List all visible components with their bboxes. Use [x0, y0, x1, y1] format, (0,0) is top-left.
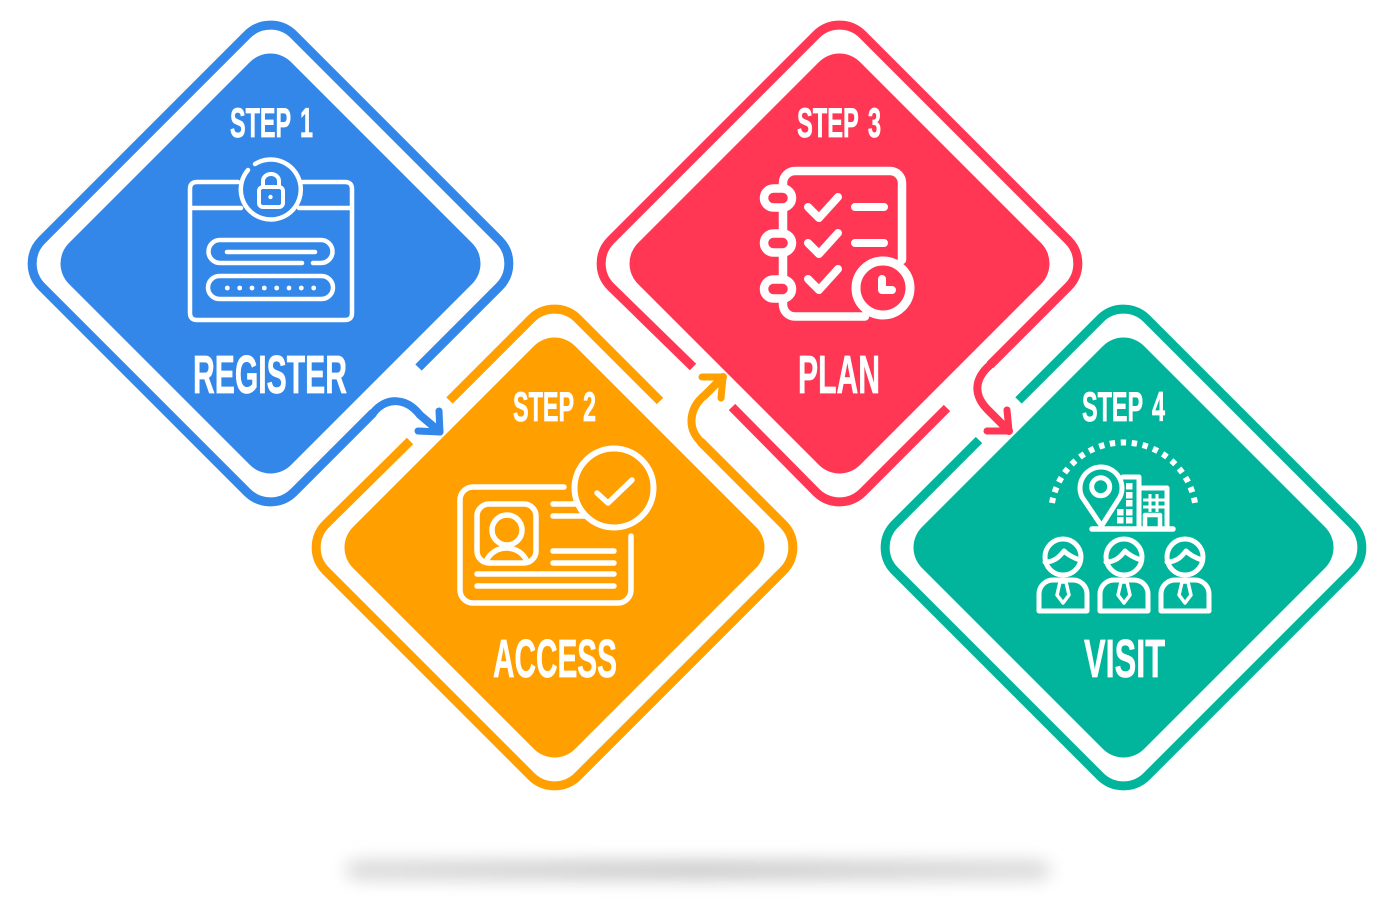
heading: step 3: STEP 3: [797, 99, 881, 146]
orange diamond fill: [345, 338, 764, 757]
person 1: [1039, 539, 1087, 611]
panel: step 1 register: [32, 25, 509, 502]
label: register: REGISTER: [193, 345, 347, 405]
teal diamond outline: [885, 309, 1362, 786]
label: visit: VISIT: [1084, 629, 1165, 689]
ground shadow: [346, 859, 1050, 881]
panel: step 4 visit: [885, 309, 1362, 786]
orange diamond outline: [316, 309, 793, 786]
heading: step 4: STEP 4: [1082, 383, 1165, 430]
blue diamond fill: [61, 54, 480, 473]
arrow: step 1 to step 2: [374, 401, 440, 432]
teal diamond fill: [914, 338, 1333, 757]
icon: registration form with lock: [190, 160, 352, 320]
label: access: ACCESS: [493, 629, 617, 689]
person 3: [1161, 539, 1209, 611]
label: plan: PLAN: [798, 345, 880, 405]
icon: id card with check: [460, 448, 654, 603]
blue diamond outline: [32, 25, 509, 502]
panel: step 2 access: [316, 309, 793, 786]
icon: location and building with visitors: [1039, 442, 1209, 611]
red diamond outline: [601, 25, 1078, 502]
icon: checklist notebook with clock: [764, 171, 910, 316]
person 2: [1100, 539, 1148, 611]
red diamond fill: [630, 54, 1049, 473]
panel: step 3 plan: [601, 25, 1078, 502]
heading: step 1: STEP 1: [230, 99, 313, 146]
heading: step 2: STEP 2: [513, 383, 596, 430]
arrow: step 2 to step 3: [692, 377, 723, 442]
arrow: step 3 to step 4: [977, 365, 1009, 431]
